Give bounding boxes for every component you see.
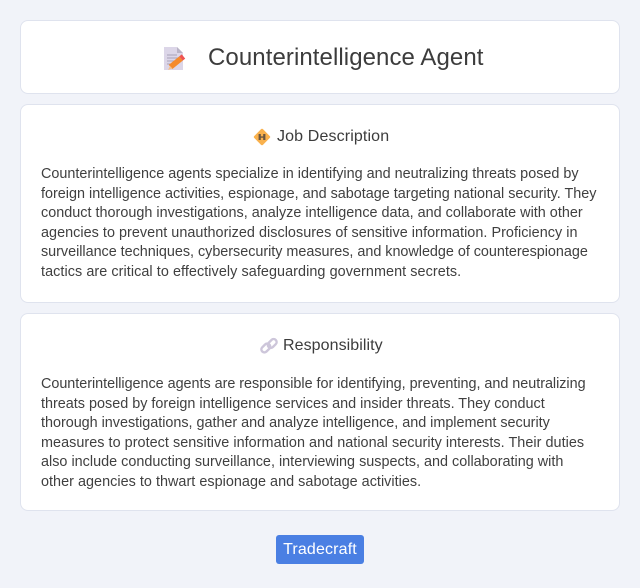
- text: responsibility: Counterintelligence agents are responsible for identifying, preventing, and neutralizing: [41, 376, 586, 392]
- text: job description: [41, 166, 596, 280]
- text: job description: Counterintelligence agents specialize in identifying and neutralizing threats posed by: [41, 166, 579, 182]
- text: responsibility: measures to protect sensitive information and national security interests. Their duties: [41, 435, 584, 451]
- button: Tradecraft: [276, 535, 364, 564]
- icon: chain link: [260, 338, 278, 354]
- text: responsibility: also include conducting surveillance, interviewing suspects, and collaborating with: [41, 454, 563, 470]
- button: Tradecraft: Tradecraft: [283, 541, 357, 558]
- panel: title: [20, 20, 620, 94]
- text: job description: surveillance techniques, cybersecurity measures, and knowledge of counterespionage: [41, 244, 588, 260]
- text: responsibility: threats posed by foreign intelligence services and insider threats. They conduct: [41, 396, 545, 412]
- text: responsibility: [41, 376, 586, 490]
- text: job description: foreign intelligence activities, espionage, and sabotage targeting national security. They: [41, 186, 596, 202]
- text: responsibility: other agencies to thwart espionage and sabotage activities.: [41, 474, 421, 490]
- heading: title: Counterintelligence Agent: [208, 44, 484, 71]
- icon: document with pencil: [164, 47, 186, 70]
- heading: responsibility: Responsibility: [283, 337, 383, 354]
- text: job description: conduct thorough investigations, analyze intelligence data, and collaborate with other: [41, 205, 583, 221]
- panel: responsibility: [20, 313, 620, 511]
- heading: job description: Job Description: [277, 128, 389, 145]
- panel: job description: [20, 104, 620, 303]
- text: job description: tactics are critical to effectively safeguarding government secrets.: [41, 264, 461, 280]
- icon: orange diamond: [254, 128, 270, 146]
- text: responsibility: thorough investigations, gather and analyze intelligence, and implement security: [41, 415, 550, 431]
- text: job description: agencies to prevent unauthorized disclosures of sensitive information. Proficiency in: [41, 225, 578, 241]
